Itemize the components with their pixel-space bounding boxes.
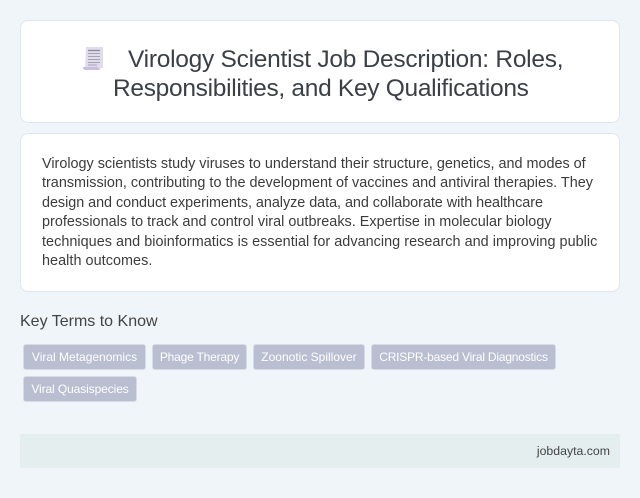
title line 2: Responsibilities, and Key Qualifications: [113, 75, 529, 102]
footer bar: [20, 434, 620, 468]
description text: health outcomes.: [42, 253, 152, 269]
footer text: jobdayta.com: [537, 444, 610, 458]
tag: Viral Metagenomics: Viral Metagenomics: [32, 350, 137, 364]
tag list: [23, 344, 556, 402]
tag: Viral Quasispecies: [23, 376, 137, 402]
description text: [42, 156, 597, 269]
panel: title card: [20, 20, 620, 123]
tag: Viral Quasispecies: Viral Quasispecies: [31, 382, 129, 396]
description text: Virology scientists study viruses to understand their structure, genetics, and modes of: [42, 156, 586, 172]
tag: Phage Therapy: Phage Therapy: [160, 350, 239, 364]
description text: techniques and bioinformatics is essential for advancing research and improving public: [42, 234, 597, 250]
tag: Viral Metagenomics: [23, 344, 146, 370]
tag: Phage Therapy: [152, 344, 247, 370]
icon: document scroll: [83, 47, 103, 70]
tag: CRISPR-based Viral Diagnostics: CRISPR-based Viral Diagnostics: [379, 350, 548, 364]
description text: professionals to track and control viral outbreaks. Expertise in molecular biology: [42, 214, 552, 230]
tag: Zoonotic Spillover: [253, 344, 365, 370]
heading: key terms: Key Terms to Know: [20, 313, 158, 330]
panel: description card: [20, 133, 620, 292]
tag: CRISPR-based Viral Diagnostics: [371, 344, 556, 370]
tag: Zoonotic Spillover: Zoonotic Spillover: [261, 350, 357, 364]
description text: design and conduct experiments, analyze data, and collaborate with healthcare: [42, 195, 543, 211]
description text: transmission, contributing to the development of vaccines and antiviral therapies. They: [42, 175, 593, 191]
title line 1: Virology Scientist Job Description: Roles,: [128, 46, 563, 73]
